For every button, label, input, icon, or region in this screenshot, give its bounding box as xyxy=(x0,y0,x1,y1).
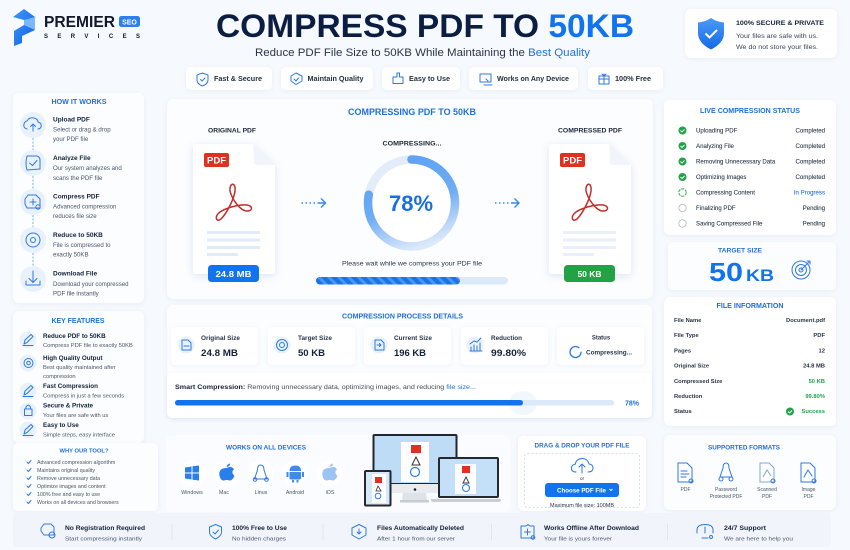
progress ring xyxy=(364,140,460,251)
benefit: free xyxy=(210,524,287,542)
value: KB xyxy=(746,266,774,285)
format: pdf: PDF xyxy=(680,487,690,493)
os: windows: Windows xyxy=(181,490,203,496)
rows: 50 KB xyxy=(809,379,825,385)
rows: 12 xyxy=(819,348,825,354)
icon: logo mark xyxy=(13,9,35,46)
heading: WHY OUR TOOL? xyxy=(60,448,109,454)
step: compress xyxy=(20,189,116,220)
pill: free xyxy=(588,67,663,90)
stat: current size: 196 KB xyxy=(394,348,427,358)
pill: maintain quality xyxy=(281,67,373,90)
benefit: free: 100% Free to Use xyxy=(232,525,287,532)
feature: quality: High Quality Output xyxy=(43,355,103,362)
benefit: deleted: Files Automatically Deleted xyxy=(377,525,464,532)
step: upload xyxy=(20,112,111,143)
step: upload: Select or drag & drop xyxy=(53,126,111,134)
step: download: Download your compressed xyxy=(53,281,129,288)
benefit: deleted: After 1 hour from our server xyxy=(377,536,455,542)
step: reduce: Reduce to 50KB xyxy=(53,232,103,239)
os: android: Android xyxy=(286,490,304,496)
panel: compressing xyxy=(167,99,653,299)
status icons xyxy=(678,126,686,227)
benefit: support: We are here to help you xyxy=(724,536,793,542)
or: or xyxy=(580,476,585,482)
format: scanned: PDF xyxy=(762,494,772,500)
progress ring: COMPRESSING... xyxy=(382,140,442,148)
step: reduce: File is compressed to xyxy=(53,242,111,249)
step: upload: your PDF file xyxy=(53,136,89,143)
benefit: offline: Your file is yours forever xyxy=(544,536,612,542)
feature: fast xyxy=(20,382,124,400)
feature: easy: Easy to Use xyxy=(43,422,79,429)
status rows xyxy=(696,128,825,228)
original pdf: 24.8 MB xyxy=(216,269,252,279)
file size limit: Maximum file size: 100MB xyxy=(550,503,615,509)
rows: PDF xyxy=(813,333,825,339)
compressed pdf: 50 KB xyxy=(577,269,602,279)
panel: supported formats xyxy=(664,435,836,510)
rows xyxy=(674,318,825,415)
benefit: no registration xyxy=(41,524,145,542)
status rows: Pending xyxy=(803,205,825,212)
status rows: Completed xyxy=(796,158,825,166)
panel: process details xyxy=(167,305,652,418)
step: download xyxy=(20,266,129,298)
panel: how it works xyxy=(13,93,144,303)
rows: File Name xyxy=(674,318,702,324)
arrow xyxy=(302,198,326,208)
status rows: Completed xyxy=(796,143,825,150)
format: image: PDF xyxy=(804,494,814,500)
feature: fast: Fast Compression xyxy=(43,383,98,390)
striped progress bar xyxy=(316,277,508,284)
panel: security notice: We do not store your files. xyxy=(736,44,818,51)
step: reduce: exactly 50KB xyxy=(53,252,89,258)
heading: KEY FEATURES xyxy=(52,318,105,325)
stat: original size xyxy=(171,327,258,365)
logo xyxy=(13,9,140,46)
status rows: Uploading PDF xyxy=(696,128,738,134)
stat: reduction: 99.80% xyxy=(491,348,526,358)
compressed pdf: PDF xyxy=(563,156,582,166)
value: 50 xyxy=(709,257,743,287)
step: analyze: scans the PDF file xyxy=(53,175,103,182)
benefit: support xyxy=(697,524,793,542)
stat: current size xyxy=(364,327,451,365)
benefit: no registration: Start compressing instantly xyxy=(65,536,142,542)
stat: original size: Original Size xyxy=(201,336,241,342)
rows: Success xyxy=(801,409,825,415)
panel: works on all devices xyxy=(166,434,510,512)
step: download: PDF file instantly xyxy=(53,290,100,298)
step: analyze: Analyze File xyxy=(53,155,91,162)
heading: SUPPORTED FORMATS xyxy=(708,444,781,452)
benefit: free: No hidden charges xyxy=(232,536,286,542)
format: password protected: Protected PDF xyxy=(710,494,742,500)
step: compress: reduces file size xyxy=(53,213,97,220)
feature: reduce xyxy=(20,332,133,349)
pill: easy to use xyxy=(382,67,460,90)
os: android xyxy=(282,460,308,496)
pill: maintain quality: Maintain Quality xyxy=(308,76,364,83)
title: COMPRESS PDF TO 50KB xyxy=(216,8,634,44)
heading: FILE INFORMATION xyxy=(716,303,784,310)
os: windows xyxy=(179,460,205,496)
progress ring: 78% xyxy=(389,191,433,216)
panel: drag and drop xyxy=(518,436,646,511)
step: reduce xyxy=(20,227,111,258)
compressed pdf: COMPRESSED PDF xyxy=(558,128,622,134)
os: linux: Linux xyxy=(255,490,268,496)
panel: key features xyxy=(13,311,144,443)
stat: target size: 50 KB xyxy=(298,348,326,358)
wait message: Please wait while we compress your PDF file xyxy=(342,260,483,268)
feature: quality: compression xyxy=(43,374,76,380)
format: password protected xyxy=(710,460,742,500)
status rows: Finalizing PDF xyxy=(696,205,736,212)
benefit: support: 24/7 Support xyxy=(724,525,767,532)
heading: TARGET SIZE xyxy=(718,248,763,254)
rows: 24.8 MB xyxy=(803,364,825,370)
original pdf: ORIGINAL PDF xyxy=(208,128,256,134)
rows: Original Size xyxy=(674,364,710,370)
footer band xyxy=(13,513,831,547)
rows: File Type xyxy=(674,333,699,339)
os: linux xyxy=(248,460,274,496)
format: image: Image xyxy=(802,487,816,493)
benefit: offline xyxy=(521,524,639,542)
heading: DRAG & DROP YOUR PDF FILE xyxy=(534,442,630,450)
monitor xyxy=(372,434,458,502)
status rows: Removing Unnecessary Data xyxy=(696,158,776,166)
stat: status xyxy=(557,327,644,365)
list: Works on all devices and browsers xyxy=(37,500,119,506)
stat: target size xyxy=(268,327,355,365)
illustration: devices xyxy=(364,434,501,506)
panel: security notice: 100% SECURE & PRIVATE xyxy=(736,20,824,27)
rows: 99.80% xyxy=(805,394,825,400)
feature: quality: Best quality maintained after xyxy=(43,365,116,371)
benefit: offline: Works Offline After Download xyxy=(544,525,639,532)
feature pills xyxy=(186,67,663,90)
panel: live status xyxy=(664,100,836,235)
benefit: no registration: No Registration Required xyxy=(65,525,145,532)
pill: easy to use: Easy to Use xyxy=(409,76,450,83)
list: Advanced compression algorithm xyxy=(37,460,116,466)
stat: reduction xyxy=(461,327,548,365)
list: Maintains original quality xyxy=(37,468,95,474)
os: mac xyxy=(214,460,240,496)
feature: secure: Your files are safe with us xyxy=(43,413,108,419)
original pdf: PDF xyxy=(207,156,226,166)
rows: Document.pdf xyxy=(786,318,825,324)
smart compression xyxy=(167,373,652,418)
panel: file information xyxy=(664,297,836,426)
status rows: Optimizing Images xyxy=(696,174,746,181)
status rows: Analyzing File xyxy=(696,143,735,150)
status rows: Compressing Content xyxy=(696,190,755,196)
panel: security notice xyxy=(685,9,837,58)
list: Remove unnecessary data xyxy=(37,476,100,482)
panel: why our tool xyxy=(13,443,158,511)
feature: easy xyxy=(20,422,115,438)
pill: works on any device: Works on Any Device xyxy=(497,76,569,83)
feature: secure xyxy=(20,402,108,420)
stat: status: Compressing... xyxy=(586,350,632,356)
status rows: Saving Compressed File xyxy=(696,220,763,228)
list xyxy=(37,460,119,506)
pill: fast and secure xyxy=(186,67,272,90)
step: analyze xyxy=(20,150,122,182)
benefit: deleted xyxy=(352,524,464,542)
feature: reduce: Compress PDF file to exactly 50KB xyxy=(43,343,133,349)
format: image xyxy=(801,463,816,500)
step: compress: Compress PDF xyxy=(53,194,100,200)
feature: reduce: Reduce PDF to 50KB xyxy=(43,333,106,340)
feature: easy: Simple steps, easy interface xyxy=(43,432,115,438)
step: upload: Upload PDF xyxy=(53,116,90,124)
heading: COMPRESSION PROCESS DETAILS xyxy=(342,314,463,320)
pill: fast and secure: Fast & Secure xyxy=(214,76,262,83)
icon: shield xyxy=(698,18,724,50)
step: analyze: Our system analyzes and xyxy=(53,165,122,172)
stat: current size: Current Size xyxy=(394,336,433,342)
heading: WORKS ON ALL DEVICES xyxy=(226,444,307,452)
value xyxy=(709,257,774,287)
feature: quality xyxy=(20,354,116,380)
status rows: In Progress xyxy=(794,190,825,196)
button: Choose PDF File xyxy=(557,488,606,494)
smart compression: Smart Compression: Removing unnecessary data, optimizing images, and reducing file size... xyxy=(175,384,476,391)
status rows: Pending xyxy=(803,220,825,228)
panel: target size xyxy=(668,242,836,290)
heading: HOW IT WORKS xyxy=(52,99,107,106)
format: password protected: Password xyxy=(715,487,737,493)
subtitle: Reduce PDF File Size to 50KB While Maintaining the Best Quality xyxy=(255,47,591,59)
rows: Pages xyxy=(674,348,691,354)
stat: original size: 24.8 MB xyxy=(201,348,239,358)
status rows: Completed xyxy=(796,174,825,181)
compressed pdf xyxy=(549,128,631,282)
os: ios: iOS xyxy=(326,490,335,496)
status rows: Completed xyxy=(796,128,825,134)
list: Optimize images and content xyxy=(37,484,106,490)
list: 100% free and easy to use xyxy=(37,492,100,498)
step: download: Download File xyxy=(53,270,97,278)
arrow xyxy=(495,198,519,208)
tablet xyxy=(364,470,392,506)
stat: target size: Target Size xyxy=(298,336,333,342)
logo: SEO xyxy=(122,20,137,26)
pill: works on any device xyxy=(469,67,578,90)
os: ios xyxy=(316,460,342,496)
rows: Compressed Size xyxy=(674,379,723,385)
os: mac: Mac xyxy=(219,490,229,496)
icon: cloud upload xyxy=(571,458,593,473)
logo: SERVICES xyxy=(44,34,140,40)
icon: target xyxy=(792,261,810,279)
laptop xyxy=(431,457,501,502)
format: pdf xyxy=(678,463,693,493)
heading: COMPRESSING PDF TO 50KB xyxy=(348,107,476,117)
rows: Reduction xyxy=(674,394,703,400)
feature: fast: Compress in just a few seconds xyxy=(43,394,124,400)
icon: success xyxy=(786,408,794,416)
format: scanned xyxy=(757,463,777,500)
step: compress: Advanced compression xyxy=(53,204,116,210)
rows: Status xyxy=(674,409,692,415)
stat: status: Status xyxy=(592,336,611,342)
heading: LIVE COMPRESSION STATUS xyxy=(700,108,800,115)
format: scanned: Scanned xyxy=(757,487,777,493)
pill: free: 100% Free xyxy=(615,76,651,83)
panel: security notice: Your files are safe with us. xyxy=(736,33,818,40)
original pdf xyxy=(193,128,275,282)
feature: secure: Secure & Private xyxy=(43,402,94,410)
stat: reduction: Reduction xyxy=(491,336,522,342)
smart compression: 78% xyxy=(625,400,640,408)
logo: PREMIER xyxy=(44,14,115,31)
